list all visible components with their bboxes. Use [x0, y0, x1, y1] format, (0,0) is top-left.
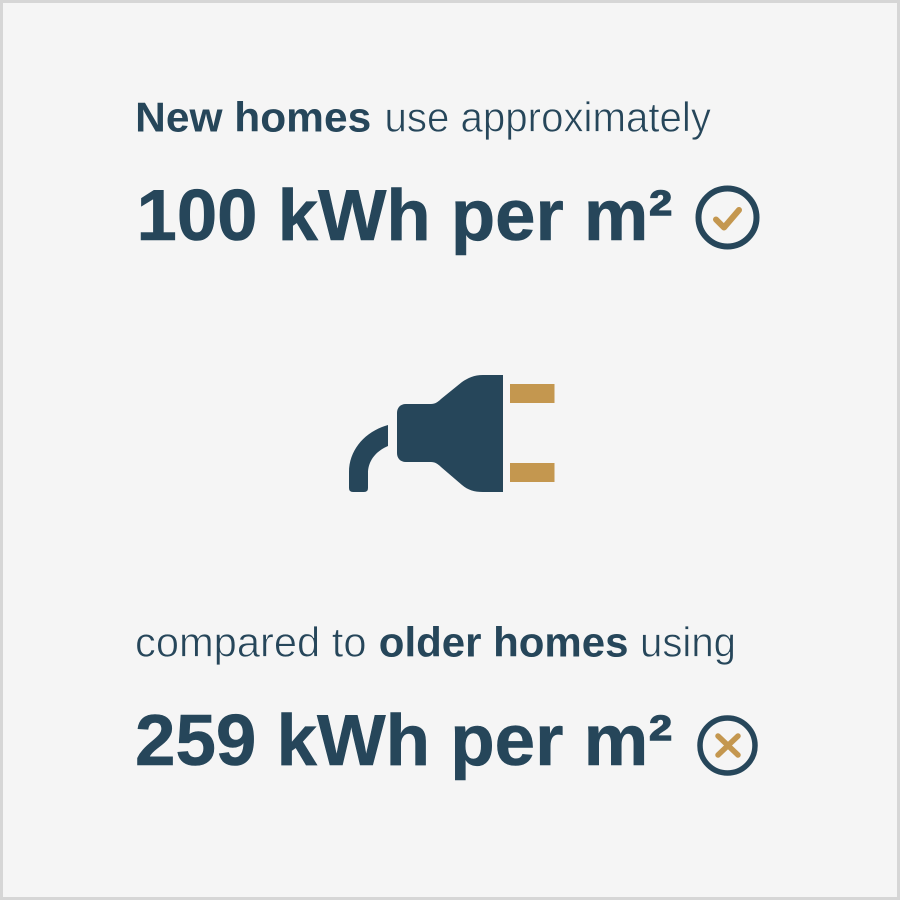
heading: older homes: using [640, 618, 736, 666]
plug cord [349, 425, 388, 492]
heading: new homes: use approximately [384, 94, 711, 140]
heading: older homes: compared to [135, 618, 366, 666]
icon: check mark in circle [698, 188, 756, 246]
heading: new homes [135, 94, 711, 140]
plug bottom prong [510, 463, 554, 482]
stat: 259 kWh per m²: 259 kWh per m² [135, 701, 672, 781]
icon: electric plug [349, 375, 554, 492]
stat: 100 kWh per m²: 100 kWh per m² [136, 176, 672, 256]
plug body [397, 375, 503, 492]
heading: older homes: older homes [379, 618, 628, 666]
heading: new homes: New homes [135, 94, 371, 140]
icon: cross in circle [700, 718, 755, 773]
heading: older homes [135, 618, 736, 666]
plug top prong [510, 384, 554, 403]
